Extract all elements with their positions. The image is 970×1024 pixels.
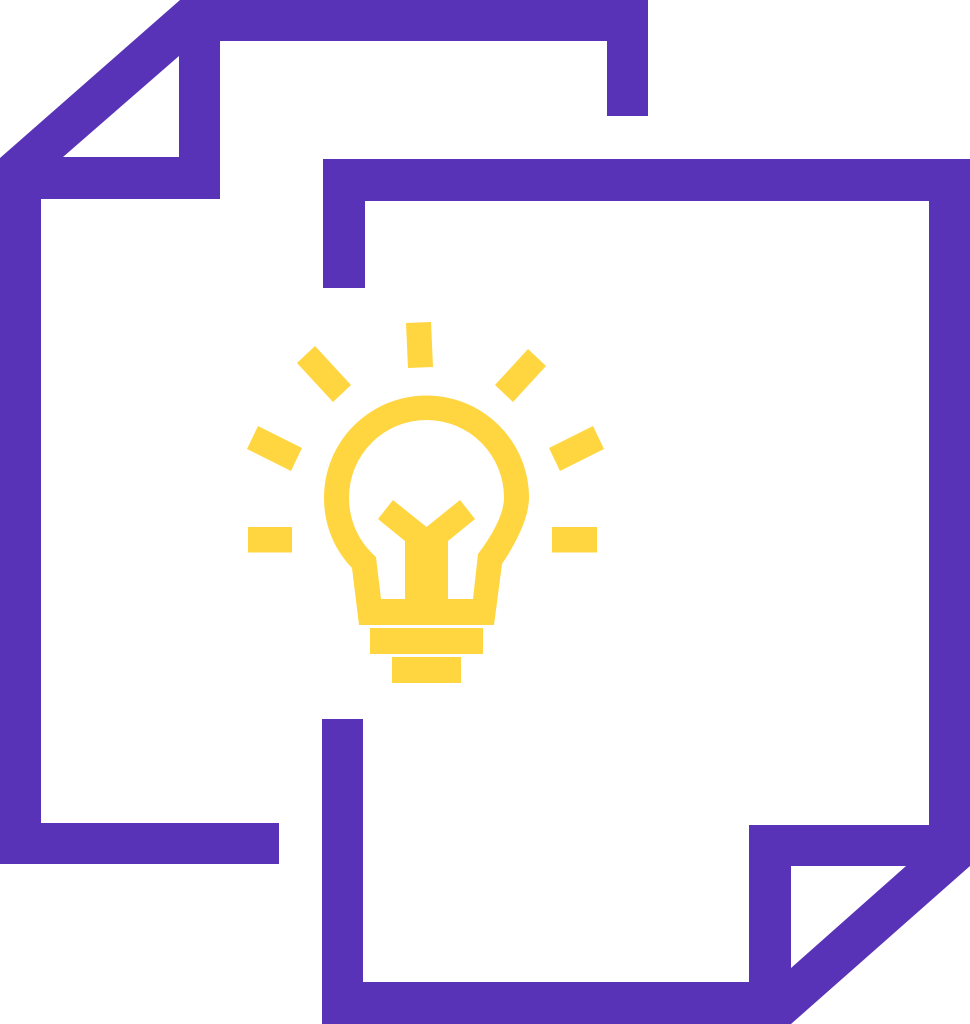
bulb base upper bar (370, 628, 483, 654)
icon: light bulb (247, 322, 604, 683)
icon: front document (bottom right) (322, 159, 970, 1024)
light rays (247, 322, 604, 552)
bulb base lower bar (392, 657, 461, 683)
icon: back document (top left) (0, 0, 648, 864)
bulb glass and filament (324, 396, 529, 625)
